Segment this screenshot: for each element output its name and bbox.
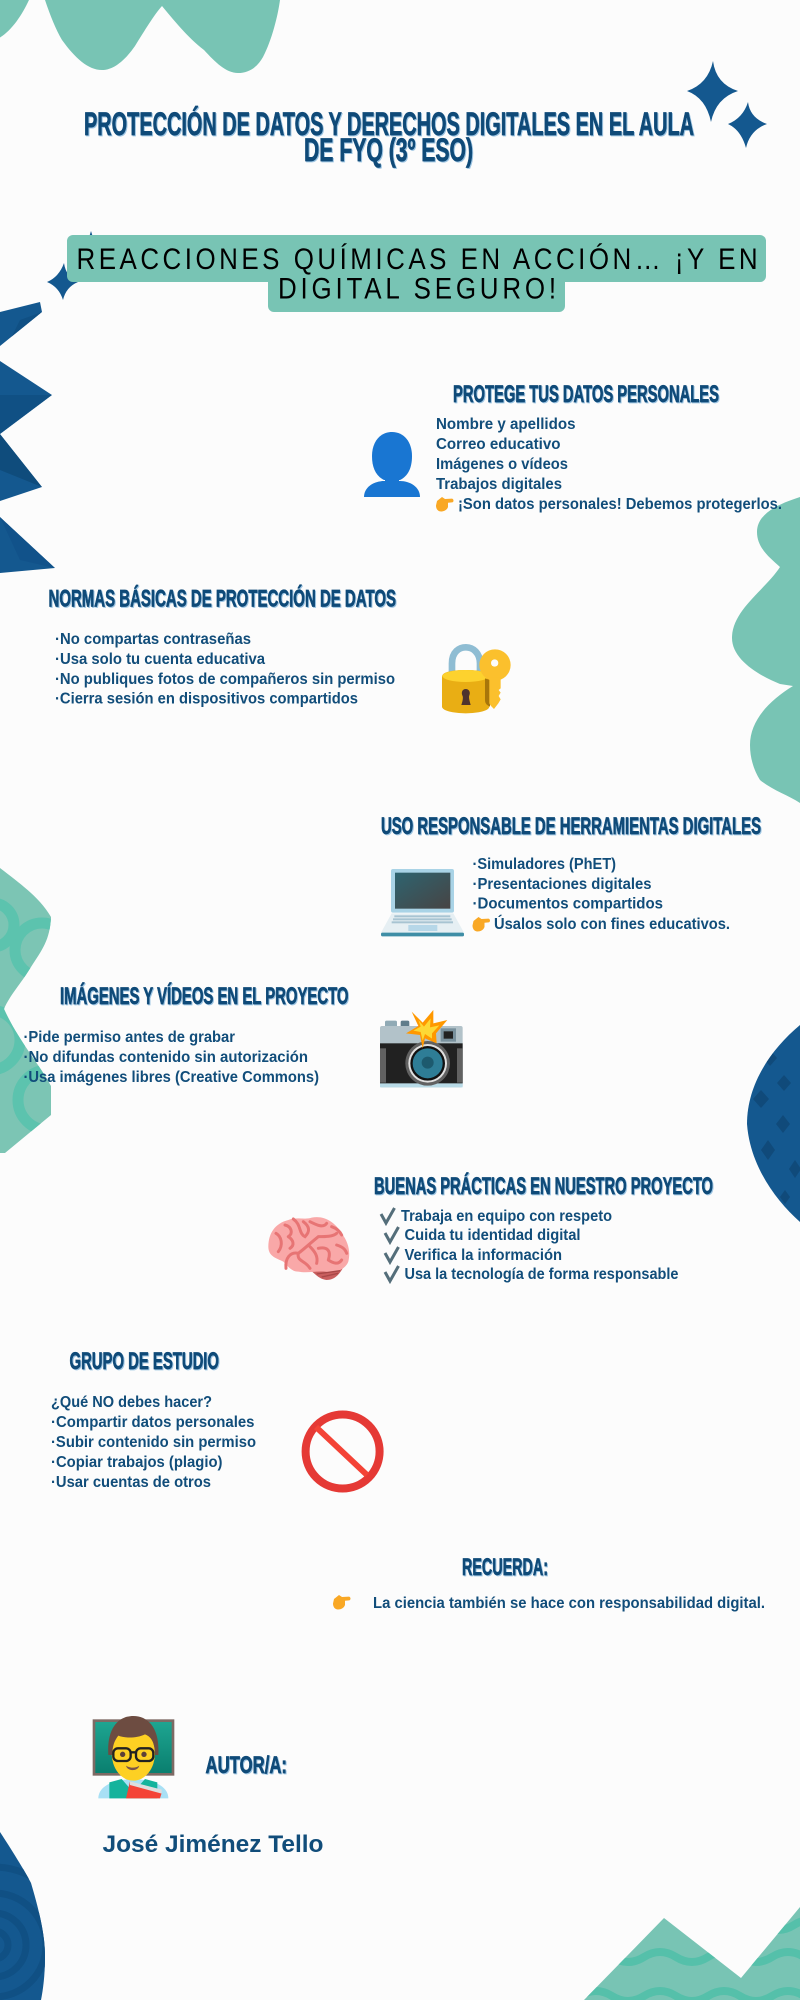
section: buenas prácticas [268,1172,713,1283]
section: protege tus datos personales [364,381,782,513]
icon: camera with flash [380,1010,463,1087]
list [401,1208,679,1283]
decoration: stars beside subtitle [47,231,100,300]
list: ·Pide permiso antes de grabar [24,1029,235,1046]
section: imágenes y vídeos [24,982,463,1087]
list: ·Simuladores (PhET) [472,856,616,873]
list [24,1029,319,1086]
decoration: left teal blob with rings [0,868,51,1153]
icon: pointing hand [333,1595,350,1610]
list: ·Cierra sesión en dispositivos compartidos [55,690,358,708]
section: grupo de estudio [51,1348,380,1491]
icons: check marks [381,1208,398,1281]
text: reminder: La ciencia también se hace con responsabilidad digital. [373,1595,765,1612]
list: ·Subir contenido sin permiso [51,1434,256,1451]
title: DE FYQ (3º ESO) [304,132,473,168]
title [84,106,694,168]
decoration: bottom left blue blob [0,1832,45,2000]
list: ·No publiques fotos de compañeros sin permiso [55,671,395,688]
text: author name: José Jiménez Tello [102,1831,324,1858]
icon: person silhouette [364,432,420,497]
heading: NORMAS BÁSICAS DE PROTECCIÓN DE DATOS [48,584,396,612]
decoration: stars top right [687,61,767,148]
icon: pointing hand [436,497,454,512]
list: Úsalos solo con fines educativos. [494,915,730,933]
list: ¿Qué NO debes hacer? [51,1394,212,1411]
list [55,631,395,708]
decoration: right blue blob [747,1025,800,1222]
list: Trabajos digitales [436,476,562,493]
section: recuerda [333,1554,765,1612]
list: Imágenes o vídeos [436,456,568,473]
section: uso responsable [381,813,761,936]
list [472,856,730,933]
subtitle banner: DIGITAL SEGURO! [278,272,556,305]
list: Correo educativo [436,436,560,453]
list: ·Presentaciones digitales [472,876,652,893]
list: ·Usar cuentas de otros [51,1474,211,1491]
subtitle banner [67,235,766,312]
decoration: top teal blobs [0,0,280,73]
list: ·No compartas contraseñas [55,631,251,648]
decoration: left jagged blue shapes [0,302,55,573]
decoration: right teal blob [732,497,800,803]
icon: pointing hand [472,917,490,932]
icon: teacher at blackboard [93,1716,174,1798]
list: ¡Son datos personales! Debemos protegerlos. [458,496,782,513]
decoration: bottom right teal mountains [580,1900,800,2000]
list: ·Compartir datos personales [51,1414,254,1431]
subtitle banner: REACCIONES QUÍMICAS EN ACCIÓN… ¡Y EN [76,242,758,275]
heading: AUTOR/A: [206,1752,287,1779]
list: ·Usa solo tu cuenta educativa [55,651,265,668]
list: Nombre y apellidos [436,416,576,433]
heading: RECUERDA: [462,1554,548,1581]
heading: IMÁGENES Y VÍDEOS EN EL PROYECTO [60,982,348,1010]
list: ·Usa imágenes libres (Creative Commons) [24,1069,319,1086]
icon: brain [268,1217,349,1280]
icon: laptop [381,869,464,936]
list: ·Copiar trabajos (plagio) [51,1454,222,1471]
list: Verifica la información [404,1247,562,1264]
section: author [93,1716,323,1858]
icon: lock and key [442,647,511,713]
list: Trabaja en equipo con respeto [401,1208,612,1225]
list: ·Documentos compartidos [472,896,663,912]
list [436,416,782,513]
list: Usa la tecnología de forma responsable [404,1266,679,1283]
icon: prohibited sign [306,1414,380,1488]
section: normas básicas [48,584,511,713]
list: ·No difundas contenido sin autorización [24,1049,308,1066]
heading: GRUPO DE ESTUDIO [70,1348,219,1375]
list: Cuida tu identidad digital [404,1227,580,1244]
list [51,1394,256,1491]
